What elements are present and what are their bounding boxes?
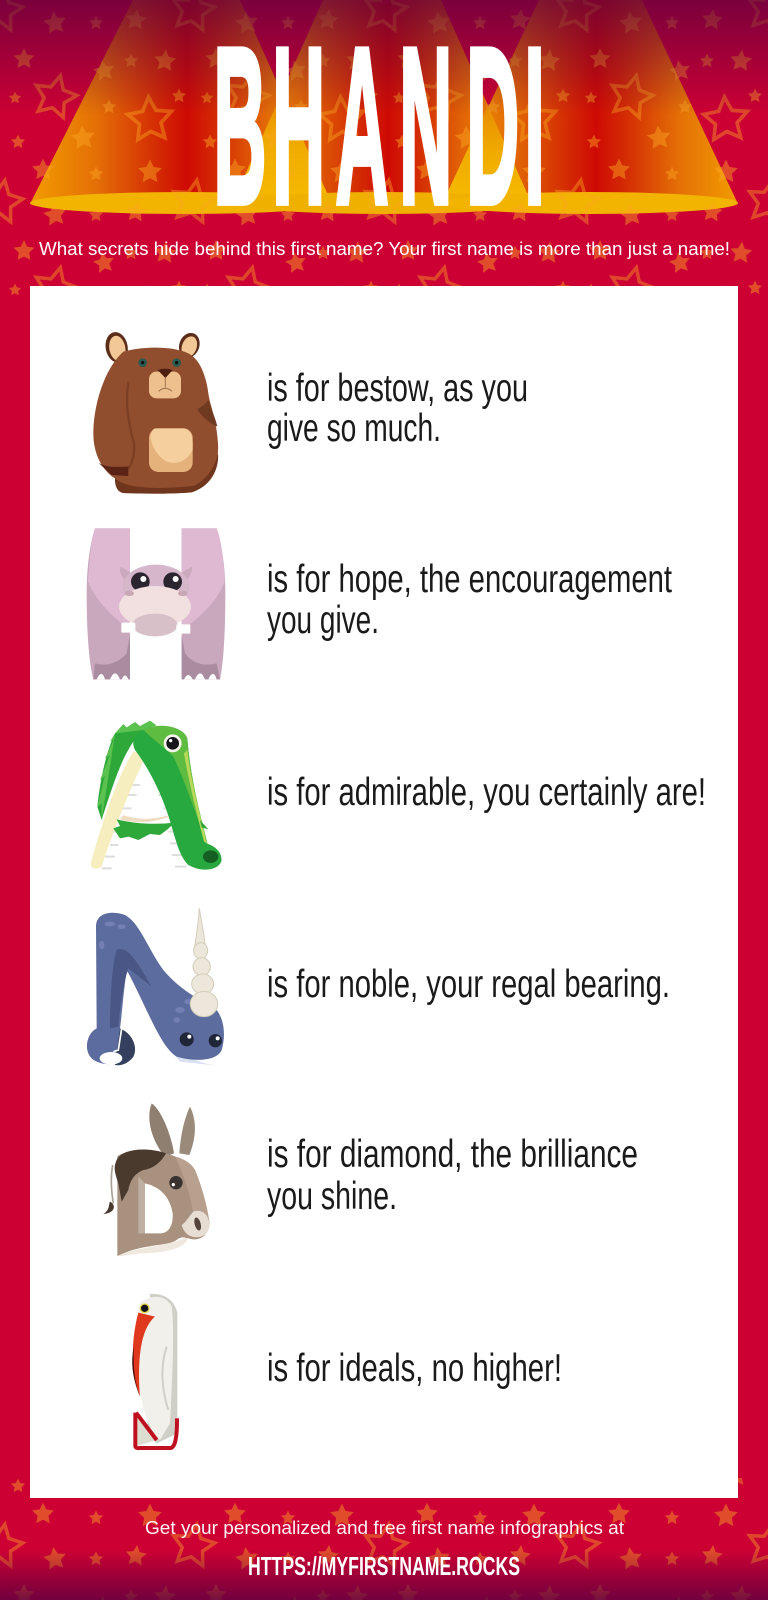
- text: B: [267, 367, 528, 450]
- icon: crocodile letter A: [91, 721, 222, 870]
- footer text: Get your personalized and free first name infographics at: [145, 1518, 624, 1538]
- text: B: give so much.: [267, 407, 441, 450]
- text: D: [267, 1133, 638, 1218]
- title: BHANDI: [214, 2, 545, 251]
- icon: stork letter I: [132, 1294, 177, 1448]
- icon: bear letter B: [93, 330, 218, 494]
- icon: hippo letter H: [87, 528, 225, 679]
- text: D: you shine.: [267, 1175, 397, 1218]
- icon: narwhal letter N: [87, 908, 224, 1066]
- footer url: HTTPS://MYFIRSTNAME.ROCKS: [248, 1551, 520, 1581]
- panel: letters: [30, 286, 738, 1498]
- spotlight cones: [30, 0, 738, 214]
- subtitle: What secrets hide behind this first name? Your first name is more than just a name!: [39, 239, 730, 259]
- icon: donkey letter D: [103, 1103, 209, 1256]
- text: B: is for bestow, as you: [267, 367, 528, 410]
- text: H: [267, 558, 672, 642]
- text: H: you give.: [267, 599, 379, 642]
- text: D: is for diamond, the brilliance: [267, 1133, 638, 1176]
- text: I: is for ideals, no higher!: [267, 1347, 562, 1390]
